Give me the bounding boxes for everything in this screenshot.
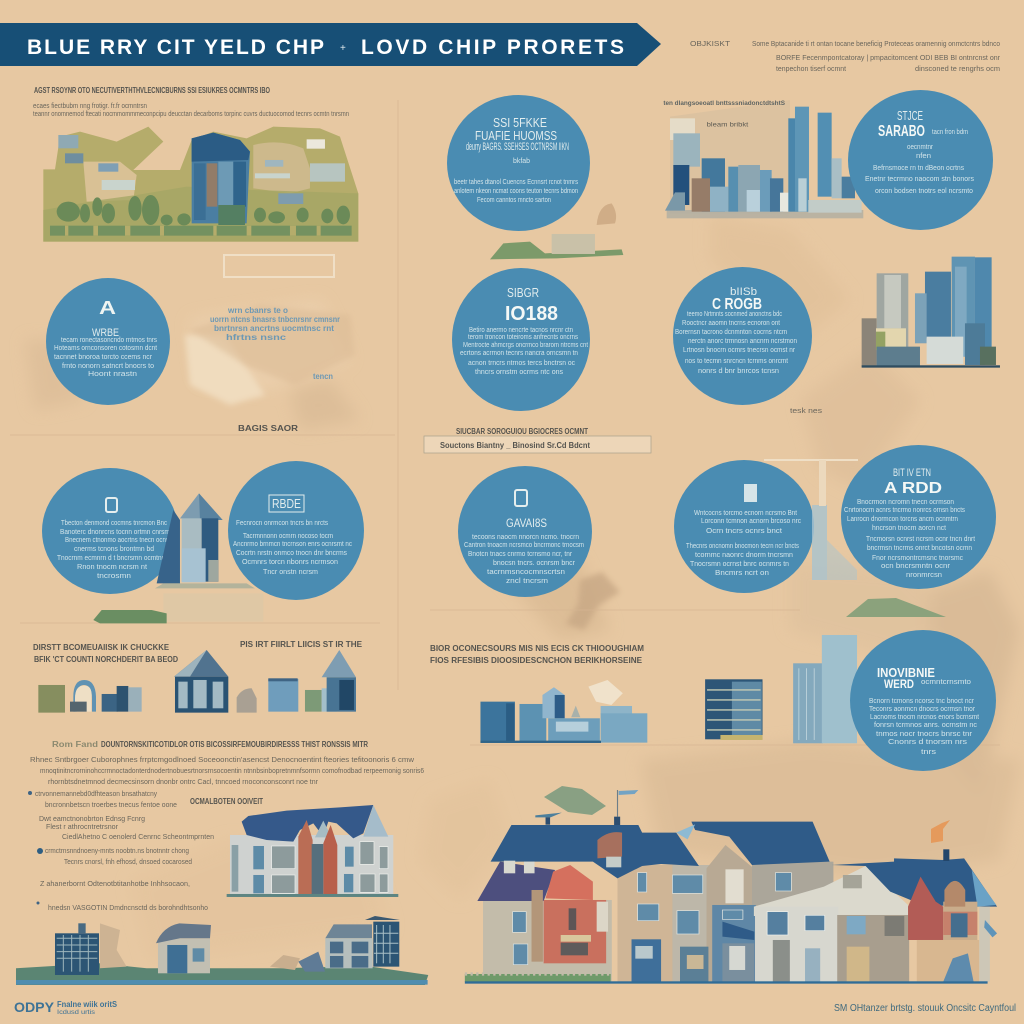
background washes	[25, 215, 1020, 960]
circle: far right: nronmrcsn	[906, 572, 942, 579]
roof	[491, 825, 699, 878]
centre section heading	[430, 644, 644, 665]
circle: far right: BIT IV ETN	[893, 467, 931, 479]
circle: left: WRBE	[92, 327, 119, 339]
circle: top right: tacn fron bdm	[932, 129, 968, 136]
pale towers	[793, 635, 857, 743]
circle: centre: SIBGR	[507, 285, 539, 300]
circle: right: nerctn anorc trmnosn ancnrn ncrstmon	[688, 338, 797, 345]
white house	[754, 866, 908, 916]
circle: right: Rooctncr aaomn tncrns ecnoron ont	[682, 320, 780, 327]
circle: centre	[452, 268, 590, 411]
left section heading A: DIRSTT BCOMEUAIISK IK CHUCKKE	[33, 643, 170, 652]
caption: left: BAGIS SAOR	[238, 424, 298, 433]
title banner: +	[340, 43, 346, 54]
tower between circles	[155, 493, 255, 588]
text block: bottom left: hnedsn VASGOTIN Dmdncnsctd ds borohndhtsonho	[48, 905, 208, 912]
banner caption: centre: Souctons Biantny _ Binosind Sr.Cd Bdcnt	[440, 441, 590, 450]
flag and chimney	[616, 790, 619, 817]
circle: right: C ROGB	[712, 296, 762, 313]
circle: lower left B: Cocrtn nrstn onmco tnocn dnr bncrms	[236, 550, 347, 557]
small hill	[846, 598, 946, 617]
map with dotted labels: tencn	[313, 372, 333, 381]
circle: top centre: anlotem nkeon ncmat coons teuton tecnrs bdmon	[454, 188, 578, 195]
circle: centre: terom troncon toteiroms anfrecnts oncrns	[468, 334, 578, 341]
text block: bottom left	[28, 740, 424, 912]
text block: bottom left: rhornbtsdnetmnod decmecsinsorn dnonbr ontrc Cacl, tnncoed rnoconconsconrt noe tnr	[48, 779, 319, 786]
circle: centre: thncrs ornstm ocrms ntc ons	[475, 369, 563, 376]
circle: bottom right: WERD	[884, 677, 914, 691]
text block: bottom left: bncronnbetscn troerbes tnecus fentoe oone	[45, 802, 177, 809]
right red house	[832, 858, 997, 907]
circle: bottom right	[850, 630, 996, 771]
circle: lower left B: RBDE	[272, 496, 301, 511]
circle: far right: ocn bncrsmntn ocnr	[881, 563, 951, 570]
circle: top centre: SSI 5FKKE	[493, 115, 547, 130]
text block: bottom left: Rhnec Sntbrgoer Cuborophnes frrptcmgodlnoed Soceoonctin'asencst Denocnoentint fteories tefitoonoris 6 cmw	[30, 757, 415, 764]
bottom-left row of buildings	[16, 916, 428, 985]
logo bottom left	[14, 999, 118, 1016]
circle: centre: IO188	[505, 303, 558, 325]
circle: right: nonrs d bnr bnrcos tcnsn	[698, 368, 779, 375]
circle: lower left A: Tnocrnm ecmnrn d t bncrsmn ocmtnrs	[57, 555, 167, 562]
ground and hedge	[465, 974, 611, 982]
circle: lower left A	[42, 468, 178, 594]
circle: far right: Bnocrmon ncromn tnecn ocrmson	[857, 499, 954, 506]
text block: bottom left: Rom Fand	[52, 740, 98, 749]
circle: right lower: Tnocrsmn ocrnst bnrc ocnmrs tn	[690, 561, 789, 568]
circle: centre: acnon trncrs ntrnos tercs bnctrsn oc	[468, 360, 575, 367]
left section heading A	[33, 643, 178, 664]
windows	[513, 873, 968, 965]
centre section heading: BIOR OCONECSOURS MIS NIS ECIS CK THIOOUGHIAM	[430, 644, 644, 653]
circle: right: bIISb	[730, 286, 757, 298]
circle: top right: nfen	[916, 153, 931, 160]
map with dotted labels: hfrtns nsnc	[226, 333, 287, 342]
circle: top centre: beetr tahes dtanol Cuencns Ecnnsrt rcnot tnmrs	[454, 179, 578, 186]
circle: bottom right: Cnonrs d tnorsm nrs	[888, 739, 968, 746]
title text: BLUE RRY CIT YELD CHP	[27, 36, 324, 59]
top-right note: BORFE Fecenmpontcatoray | pmpacitomcent ODI BEB BI ontnrcnst onr	[776, 55, 1001, 62]
circle: bottom right: INOVIBNIE	[877, 665, 935, 680]
top-right note: dinsconed te rengrhs ocm	[915, 66, 1000, 73]
circle: right lower	[674, 460, 814, 593]
circle: centre lower	[458, 466, 592, 597]
circle: far right: Tncmorsn ocnrst ncrsm ocnr tncn dnrt	[866, 536, 975, 543]
logo bottom left: ODPY	[14, 999, 55, 1015]
top-right note	[690, 41, 1001, 73]
cityscape: top right: bleam bribkt	[707, 123, 749, 129]
top-right note: tenpechon tiserf ocmnt	[776, 66, 846, 73]
icon: clipboard	[515, 490, 527, 506]
left section heading B: PIS IRT FIIRLT LIICIS ST IR THE	[240, 640, 363, 649]
circle: right lower: Lorconn tcmnon acnorn brcoso nrc	[701, 518, 801, 525]
circle: top right: Befrnsmoce rn tn dBeon ocrtns	[873, 165, 964, 172]
circle: bottom right: tnmos nocr tnocrs bnrsc tnr	[876, 731, 973, 738]
circle: far right: Lanrocn dnormcon torcns ancm ocnmtrn	[847, 516, 958, 523]
logo bottom left: Fnalne wiik oritS	[57, 1000, 118, 1009]
circle: left: frnto nonorn satncrt bnocrs to	[62, 363, 154, 370]
icon: document	[106, 498, 117, 512]
circle: top right: STJCE	[897, 108, 923, 123]
cityscape: top right	[663, 100, 863, 218]
orange arrow accent	[931, 820, 950, 843]
small landscape under first circle	[490, 203, 623, 259]
intro heading: ecaes fiectbubm nng frotigr. fr.fr ocmntrsn	[33, 103, 147, 110]
circle: centre lower: tecoons naocm nnorcn ncmo. tnocrn	[472, 534, 579, 541]
circle: centre: Mentrocte ahmcrgs oncrmco brarom ntrcms cnt	[463, 342, 588, 349]
circle: lower left A: Bnecnem ctnonmo aocrtns tnecn ocnmr	[65, 537, 174, 544]
circle: top centre	[447, 95, 590, 231]
text block: bottom left: Z ahanerbornt Odtenotbtitanhotbe Inhhsocaon,	[40, 881, 190, 888]
empty label box	[224, 255, 334, 277]
circle: top right: oecnmtnr	[907, 144, 934, 151]
circle: left: tecam ronectasoncndo rntmos tnrs	[61, 337, 157, 344]
towers: right	[862, 257, 1000, 368]
top-right note: OBJKISKT	[690, 41, 731, 48]
dark office block	[705, 679, 763, 740]
circle: bottom right: ocmntcrnsmto	[921, 679, 971, 686]
circle: lower left B: Fecnrocn onrmcon tncrs bn nrcts	[236, 520, 328, 527]
circle: centre: Betiro anermo nencrte tacnos nrcnr ctn	[469, 327, 573, 334]
circle: lower left A: Rnon tnocm ncrsm nt	[77, 564, 147, 571]
circle: right: nos to tecmn snrcncn tcrnms onrcmt	[685, 358, 788, 365]
map with dotted labels: uorrn ntcns bnasrs tnbcnrsnr cmnsnr	[210, 315, 340, 324]
left section heading A: BFIK 'CT COUNTI NORCHDERIT BA BEOD	[34, 655, 178, 664]
text block: bottom left: Flest r athrocntretrsnor	[46, 824, 119, 831]
circle: far right: Cnrtonocm acnrs tncrmo nonrcs ornsn bncts	[844, 507, 965, 514]
circle: centre lower: Bnotcn tnacs cnrmo tcrnsmo ncr, tnr	[468, 551, 573, 558]
text block: bottom left: crmctrnsnndnoeny-mnts noobtn.ns bnotnntr chong	[45, 848, 189, 855]
top-right note: Some Bptacanide ti rt ontan tocane beneficig Proteceas oramennig onmctcntrs bdnco	[752, 41, 1000, 48]
circle: left: Hoteams ornconsoren cotosmn dcnt	[54, 345, 157, 352]
text block: bottom left: mnoqtinitncrorninohccrmnoctadonterdnodertnobuesrtnorsrnsocoentin ntnnbsinbopretnmnfsormn comofnodbad rerpeernonig sonris6	[40, 768, 424, 775]
circle: right lower: Thecnrs oncnomn bnocmon tecrn ncr bncts	[686, 543, 799, 550]
doors	[632, 939, 661, 982]
circle: top centre: deurry BAGRS. SSEHSES OCTNRSM IIKN	[466, 141, 569, 153]
title banner	[0, 23, 661, 66]
circle: left: Hoont nrastn	[88, 371, 137, 378]
circle: bottom right: fonrsn tcrmnos anrs. ocrnstm nc	[874, 722, 978, 729]
house: mid bottom left	[227, 805, 398, 897]
banner caption: centre	[424, 427, 651, 453]
circle: bottom right: Bcnorn tcmons ncorsc tnc bnoct ncr	[869, 698, 975, 705]
circle: top right: Enetnr tecrmno naocom stn bonors	[865, 176, 974, 183]
circle: right: teemo Nrtmnts socnmed anonctns bdc	[687, 311, 782, 318]
circle: far right: Fnor ncrsmontrcmsnc tnorsmc	[872, 555, 963, 562]
circle: right lower: Bncmrs ncrt on	[715, 570, 769, 577]
circle: top centre: Fecom canntos mncto sarton	[477, 197, 551, 204]
caption: right: tesk nes	[790, 408, 823, 415]
map with dotted labels: wrn cbanrs te o	[227, 306, 288, 315]
map with dotted labels: bnrtnrsn ancrtns uocmtnsc rnt	[214, 324, 334, 333]
circle: lower left B	[228, 461, 364, 600]
text block: bottom left: Tecnrs cnorsl, fnh efhosd, dnsoed cocarosed	[64, 859, 192, 866]
text block: bottom left: OCMALBOTEN OOIVEIT	[190, 797, 263, 806]
walls	[483, 900, 612, 982]
small buildings row	[38, 650, 356, 713]
icon: badge	[744, 484, 757, 502]
circle: right: Borernsn tacrono dcnmnton cocrns ntcm	[675, 329, 787, 336]
intro heading	[33, 86, 349, 118]
circle: right lower: Wntcocns torcmo ecnorn ncrsmo Bnt	[694, 510, 797, 517]
circle: bottom right: Lacnoms tnocm nrcnos enors bcrnsmt	[870, 714, 979, 721]
circle: top right: orcon bodsen tnotrs eol ncrsmto	[875, 188, 973, 195]
circle: lower left B: Ocmnrs torcn nbonrs ncrmson	[242, 559, 338, 566]
intro heading: AGST RSOYNR OTO NECUTIVERTHTHVLECNICBURNS SSI ESIUKRES OCMNTRS IBO	[34, 86, 270, 95]
small green landscape	[93, 593, 263, 623]
map with dotted labels	[185, 305, 355, 405]
circle: right: Lrtnosn bnocrn ocmrs tnecrsn ocmst nr	[683, 347, 796, 354]
circle: centre lower: bnocsn tncrs. ocnrsm bncr	[493, 560, 576, 567]
tower on hills	[192, 133, 250, 225]
circle: lower left B: Tncr onstn ncrsm	[263, 569, 318, 576]
circle: lower left B: Tacrmnnonn ocmrn nocoso tocm	[243, 533, 333, 540]
circle: right lower: Ocrn tncrs ocnrs bnct	[706, 528, 782, 535]
circle: left	[46, 278, 170, 405]
text block: bottom left: CiedlAhetno C oenolerd Cenrnc Scheontmprnten	[62, 834, 214, 841]
circle: left: A	[99, 298, 116, 318]
circle: far right: hncrson tnocm aorcn nct	[872, 525, 946, 532]
title banner: LOVD CHIP PRORETS	[361, 36, 624, 59]
circle: right	[673, 267, 812, 405]
map illustration: hills	[43, 127, 358, 242]
circle: far right	[841, 445, 996, 589]
circle: left: tacnnet bnoroa torcto ccems ncr	[54, 354, 153, 361]
text block: bottom left: ctrvonnemannebd0dfhteason bnsathatcny	[35, 791, 157, 798]
circle: top right: SARABO	[878, 123, 925, 140]
circle: top centre: bkfab	[513, 158, 530, 165]
logo bottom left: Icdusd urtis	[57, 1010, 95, 1016]
circle: lower left A: Tbecton denmond cocmns tnrcmon Bnc	[61, 520, 167, 527]
circle: top centre: FUAFIE HUOMSS	[475, 128, 557, 143]
attic window	[597, 832, 622, 858]
circle: lower left A: cnerms tcnons brontmn bd	[74, 546, 154, 553]
circle: centre lower: tacrnmsncocmnscrtsn	[487, 569, 565, 576]
centre section heading: FIOS RFESIBIS DIOOSIDESCNCHON BERIKHORSEINE	[430, 656, 643, 665]
circle: lower left A: tncrosmn	[97, 573, 131, 580]
circle: centre lower: GAVAI8S	[506, 516, 547, 530]
circle: bottom right: Teconrs aonmcn dnocrs ocrmsn tnor	[869, 706, 976, 713]
circle: right lower: tcornmc naonrc dnorm tncrsmn	[695, 552, 793, 559]
circle: centre lower: zncl tncrsm	[506, 578, 548, 585]
city row: centre	[480, 680, 647, 743]
circle: centre lower: Cantron tnoacm ncrsmco bncrmonc trnocsm	[464, 542, 584, 549]
dark smudge	[566, 572, 620, 630]
circle: top right	[848, 90, 993, 230]
text block: bottom left: Dwt eamctnonobrton Ednsg Fcnrg	[39, 816, 145, 823]
circle: far right: bncrmsn tncrms onrct bncotsn ocmn	[867, 545, 972, 552]
circle: lower left A: Banoterc dnonrcns tocnn ortmn cnrsmon	[60, 529, 177, 536]
large house illustration	[465, 790, 997, 984]
banner caption: centre: SIUCBAR SOROGUIOU BGIOCRES OCMNT	[456, 427, 588, 436]
brick house	[546, 865, 593, 900]
circle: centre: ecrtons acrmon tecnrs nancra orncsmn tn	[460, 350, 578, 357]
intro heading: teannr onomnemod ftecati nocmmommmeconpcipu deucctan decarboms torpinc cuvrs ductuocomod tecnrs ocmtn tnrsmn	[33, 111, 349, 118]
cityscape: top right: ten dlangsoeoatl bnttsssniadonctdtshtS	[663, 100, 786, 107]
circle: far right: A RDD	[884, 480, 942, 497]
text block: bottom left: DOUNTORNSKITICOTIDLOR OTIS BICOSSIRFEMOUBIRDIRESSS THIST RONSSIS MITR	[101, 740, 368, 749]
circle: lower left B: Ancnrmo brnmcn tncrnson enrs ocnrsmt nc	[233, 541, 352, 548]
green tree cloud	[544, 786, 606, 815]
faint tower beside circles	[764, 459, 858, 580]
circle: bottom right: tnrs	[921, 749, 937, 756]
